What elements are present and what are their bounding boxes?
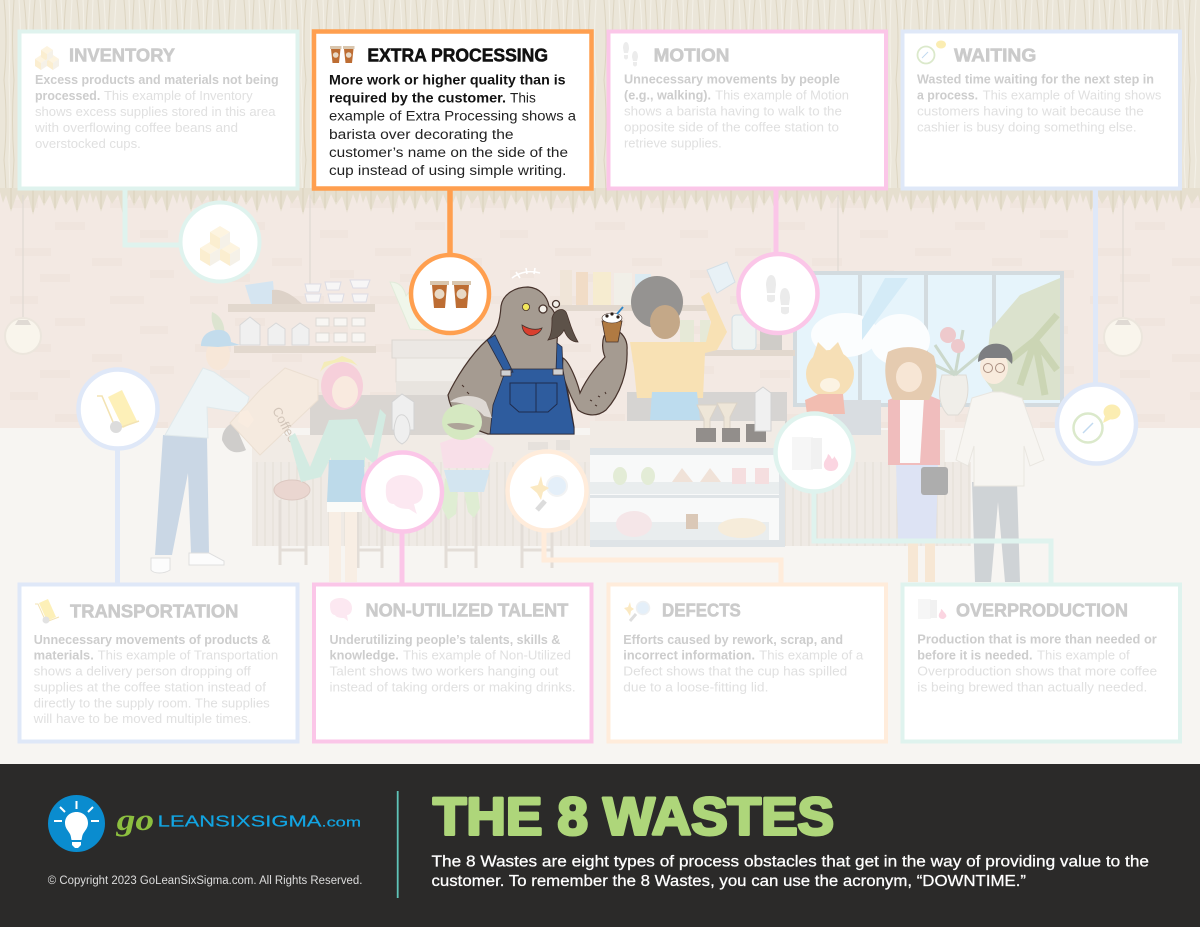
counter items xyxy=(528,440,570,450)
monocle glasses xyxy=(539,300,560,313)
bar stools xyxy=(280,500,552,568)
icon: brain xyxy=(330,598,352,621)
description: This example of Waiting shows xyxy=(983,87,1161,102)
description: More work or higher quality than is xyxy=(329,72,566,88)
heading: INVENTORY xyxy=(69,45,175,66)
heading: WAITING xyxy=(954,45,1036,66)
description: Talent shows two workers hanging out xyxy=(330,664,559,679)
description: cashier is busy doing something else. xyxy=(917,119,1136,134)
description: required by the customer. xyxy=(329,90,506,106)
heading: OVERPRODUCTION xyxy=(956,600,1128,621)
logo wordmark: LEANSIXSIGMA xyxy=(158,814,322,831)
description: incorrect information. xyxy=(623,648,755,663)
description: This example of a xyxy=(759,648,864,663)
description xyxy=(330,632,576,695)
heading: NON-UTILIZED TALENT xyxy=(366,600,569,621)
description: customer. To remember the 8 Wastes, you can use the acronym, “DOWNTIME.” xyxy=(432,873,1026,890)
panel: defects xyxy=(608,584,886,742)
background: thatched roof xyxy=(0,0,1200,218)
back shelf products xyxy=(555,270,795,356)
description: is being brewed than actually needed. xyxy=(917,680,1147,695)
description: Wasted time waiting for the next step in xyxy=(917,71,1154,86)
icon: magnifying glass xyxy=(624,602,650,621)
description: Underutilizing people’s talents, skills & xyxy=(330,632,560,647)
bar counter xyxy=(252,435,592,546)
heading: DEFECTS xyxy=(662,600,741,621)
icon: footprints xyxy=(623,42,638,66)
icon: hand truck xyxy=(35,599,59,624)
arm xyxy=(562,329,627,415)
logo wordmark xyxy=(115,802,361,837)
description: supplies at the coffee station instead of xyxy=(34,679,266,694)
description: customers having to wait because the xyxy=(917,103,1144,118)
delivery person carrying coffee sack xyxy=(151,330,318,573)
wall shelves and stock xyxy=(212,280,444,353)
description: This example of Motion xyxy=(715,88,849,103)
description xyxy=(34,72,279,151)
description: Excess products and materials not being xyxy=(35,72,279,87)
description: a process. xyxy=(917,87,978,102)
description: instead of taking orders or making drinks. xyxy=(330,680,576,695)
description xyxy=(917,71,1161,134)
description: customer’s name on the side of the xyxy=(329,145,568,161)
description: barista over decorating the xyxy=(329,127,514,143)
icon circle: transportation hand truck xyxy=(78,370,158,448)
description xyxy=(33,632,278,726)
icon: coffee cups xyxy=(330,46,354,63)
icon circle: motion footprints xyxy=(738,254,818,333)
frog customer on stool xyxy=(440,396,494,520)
logo xyxy=(48,795,361,852)
waiting customer man xyxy=(956,344,1044,582)
vase and flowers xyxy=(925,327,985,415)
copyright: © Copyright 2023 GoLeanSixSigma.com. All Rights Reserved. xyxy=(48,875,362,887)
connector lines xyxy=(118,190,1096,584)
panel: inventory xyxy=(20,32,298,188)
description: Production that is more than needed or xyxy=(917,632,1157,647)
description: directly to the supply room. The supplies xyxy=(34,695,270,710)
pendant lamps xyxy=(5,195,1142,356)
description: retrieve supplies. xyxy=(624,136,722,151)
description: This xyxy=(510,90,536,106)
heading: EXTRA PROCESSING xyxy=(367,45,548,66)
panel: overproduction xyxy=(902,584,1180,742)
display case xyxy=(590,421,785,547)
moustache xyxy=(548,310,578,342)
barista with afro xyxy=(627,262,787,430)
eye xyxy=(522,303,530,311)
description: shows excess supplies stored in this area xyxy=(35,104,276,119)
panel: transportation xyxy=(20,584,298,742)
description xyxy=(623,632,864,695)
buckles xyxy=(501,370,511,376)
icon circle: waiting clock and speech bubble xyxy=(1057,384,1136,464)
icon: boxes xyxy=(35,46,59,70)
description: Unnecessary movements of products & xyxy=(34,632,271,647)
heading: MOTION xyxy=(654,45,729,66)
window xyxy=(795,273,1062,405)
description: Overproduction shows that more coffee xyxy=(917,664,1157,679)
title: THE 8 WASTES xyxy=(433,788,834,846)
espresso machine xyxy=(310,340,510,435)
panel: motion xyxy=(608,32,886,188)
description: before it is needed. xyxy=(917,648,1032,663)
sparkle lines xyxy=(512,268,540,278)
woman with pink hair xyxy=(289,356,410,582)
description xyxy=(432,853,1149,890)
mouth xyxy=(522,325,542,336)
right counter and register xyxy=(785,400,971,546)
icon circle: defects magnifying glass xyxy=(508,452,586,530)
overalls xyxy=(487,335,574,434)
description: (e.g., walking). xyxy=(624,88,711,103)
description: cup instead of using simple writing. xyxy=(329,163,566,179)
description: This example of xyxy=(1037,648,1130,663)
description: with overflowing coffee beans and xyxy=(34,120,238,135)
description xyxy=(624,72,849,151)
panel: non-utilized talent xyxy=(314,584,592,742)
whisker marks and arm freckles xyxy=(462,385,606,406)
sea lion barista with moustache and iced coffee xyxy=(448,268,627,434)
icon circle: inventory cubes xyxy=(180,202,260,282)
description: processed. xyxy=(35,88,100,103)
icon circle: overproduction cups and flame xyxy=(776,414,854,492)
description: Defect shows that the cup has spilled xyxy=(623,664,847,679)
description: This example of Inventory xyxy=(104,88,253,103)
waiting customer woman xyxy=(885,347,948,582)
description: Efforts caused by rework, scrap, and xyxy=(623,632,843,647)
description: The 8 Wastes are eight types of process obstacles that get in the way of providing value to the xyxy=(432,853,1149,870)
description: materials. xyxy=(34,648,94,662)
panel: extra processing (highlighted) xyxy=(314,32,592,188)
icon circle: non-utilized talent brain xyxy=(363,452,442,532)
description: This example of Transportation xyxy=(98,648,278,662)
heading: TRANSPORTATION xyxy=(70,601,238,622)
description: shows a barista having to walk to the xyxy=(624,104,842,119)
logo wordmark: .com xyxy=(322,815,361,830)
delivery person carrying coffee sack: Coffee xyxy=(269,404,300,445)
description: This example of Non-Utilized xyxy=(403,648,571,663)
description xyxy=(917,632,1157,695)
divider xyxy=(397,791,399,898)
description: will have to be moved multiple times. xyxy=(33,711,251,726)
footer band xyxy=(0,764,1200,927)
logo wordmark: go xyxy=(115,802,154,837)
body xyxy=(448,287,574,434)
description: due to a loose-fitting lid. xyxy=(623,680,768,695)
description xyxy=(329,72,576,179)
description: shows a delivery person dropping off xyxy=(34,664,251,678)
description: example of Extra Processing shows a xyxy=(329,109,576,125)
illustration: cafe scene, faded xyxy=(5,195,1142,582)
coffee brewers xyxy=(696,387,771,442)
icon: clock and bubble xyxy=(918,40,946,64)
icon: light bulb xyxy=(48,795,105,852)
description: Unnecessary movements by people xyxy=(624,72,840,87)
description: opposite side of the coffee station to xyxy=(624,120,839,135)
stool seat xyxy=(274,480,310,500)
icon circle: extra processing cups xyxy=(411,255,489,333)
cashier fox xyxy=(805,342,854,414)
description: overstocked cups. xyxy=(35,136,141,151)
description: knowledge. xyxy=(330,648,399,663)
icon: cups and flame xyxy=(918,599,946,619)
iced coffee xyxy=(602,307,623,342)
panel: waiting xyxy=(902,32,1180,188)
